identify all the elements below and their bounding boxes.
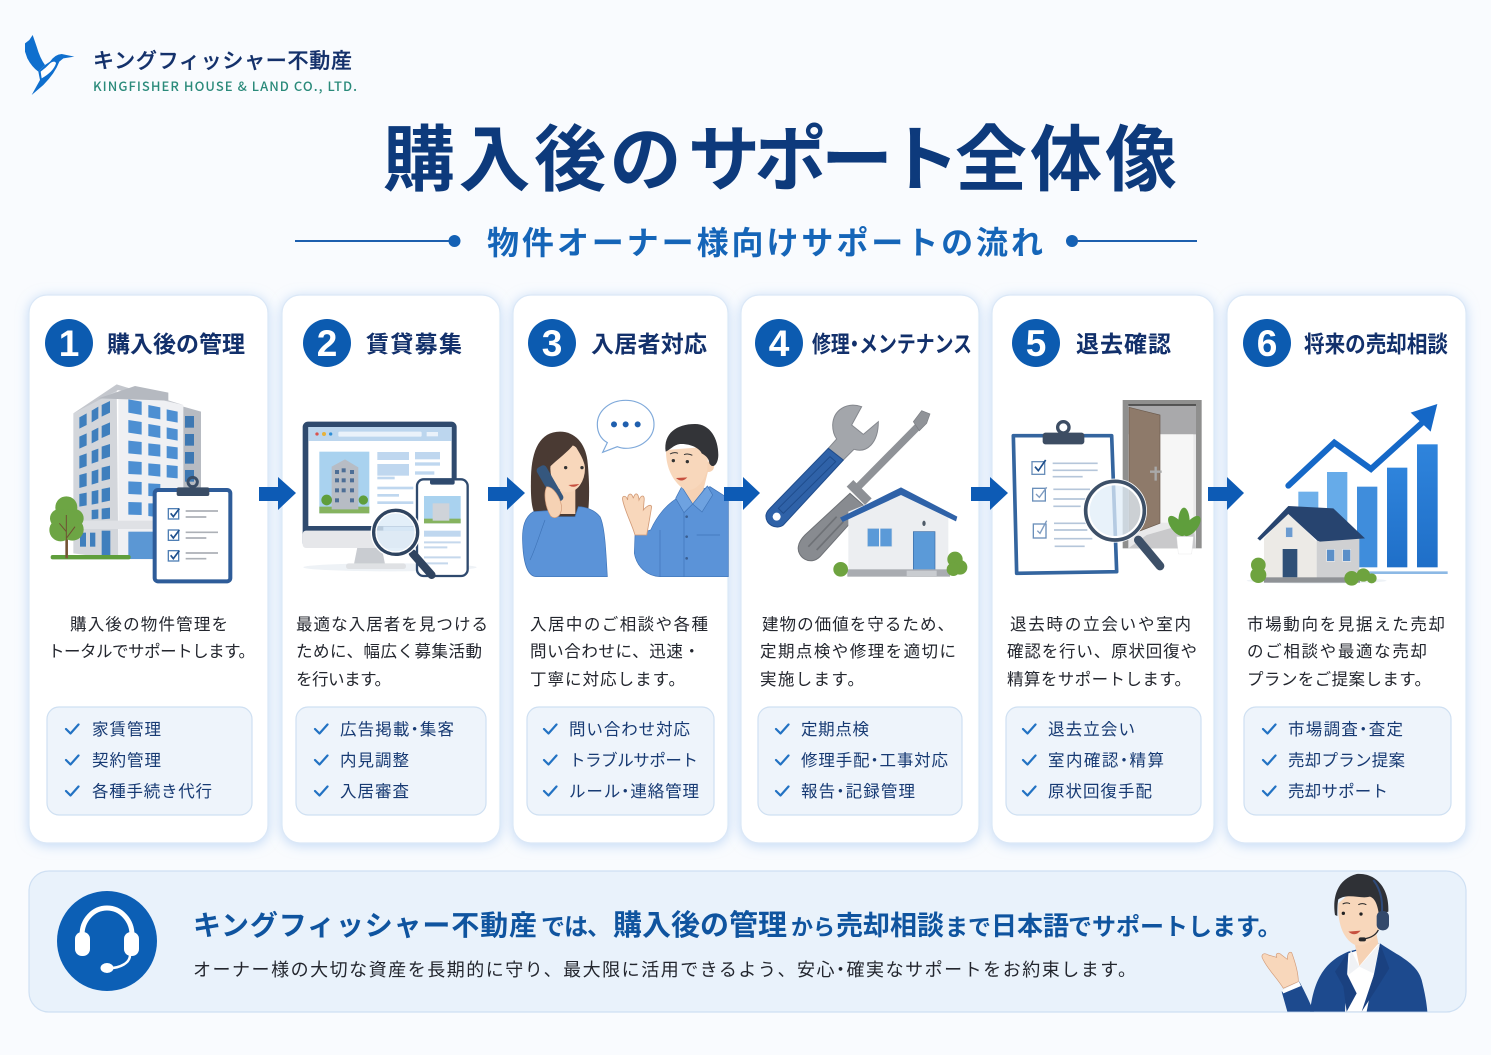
arrow 2: [488, 477, 525, 510]
step 3 checklist: [527, 707, 714, 815]
title: 購入後の: [383, 101, 685, 206]
icon: rising chart with house: [1247, 404, 1448, 586]
step 4 badge: [755, 319, 803, 367]
step 1 checklist: [47, 707, 252, 815]
step 3 description: 丁寧に対応します。: [530, 666, 685, 690]
subtitle: 物件オーナー様向けサポートの流れ: [487, 218, 1043, 264]
step 1 heading: 購入後の管理: [107, 325, 245, 359]
icon: building with clipboard: [49, 384, 230, 581]
step 2 badge: 2: [317, 323, 337, 364]
step 4 description: 定期点検や修理を適切に: [760, 638, 956, 662]
step 3 badge: [528, 319, 576, 367]
step 6 badge: 6: [1257, 323, 1277, 364]
arrow 5: [1208, 477, 1244, 510]
icon: wrench, screwdriver and house: [766, 405, 967, 577]
panel: step 5: [992, 295, 1214, 843]
step 1 checklist: 各種手続き代行: [92, 778, 212, 802]
step 2 badge: [303, 319, 351, 367]
panel: step 2: [282, 295, 500, 843]
step 2 heading: 賃貸募集: [366, 325, 462, 359]
step 5 heading: 退去確認: [1076, 325, 1171, 359]
subtitle: [295, 218, 1197, 264]
step 1 checklist: 家賃管理: [92, 716, 161, 740]
step 3 badge: 3: [542, 323, 562, 364]
step 3 description: 問い合わせに、迅速・: [530, 638, 700, 662]
step 1 description: 購入後の物件管理を: [70, 611, 228, 635]
step 5 description: 確認を行い、原状回復や: [1007, 638, 1197, 662]
step 5 description: 退去時の立会いや室内: [1010, 611, 1191, 635]
banner headline: から: [791, 910, 835, 942]
logo english name: KINGFISHER HOUSE & LAND CO., LTD.: [93, 76, 357, 95]
title: サポート: [688, 101, 954, 206]
banner headline: 購入後の管理: [613, 902, 787, 944]
step 5 description: 精算をサポートします。: [1007, 666, 1191, 690]
step 2 checklist: [296, 707, 486, 815]
arrow 1: [259, 477, 296, 510]
arrow 3: [724, 477, 760, 510]
step 1 description: [48, 611, 255, 662]
step 6 checklist: [1244, 707, 1451, 815]
arrow 4: [971, 477, 1008, 510]
step 4 description: 実施します。: [760, 666, 864, 690]
step 1 badge: [45, 319, 93, 367]
step 6 heading: 将来の売却相談: [1304, 325, 1448, 359]
banner headline: では、: [541, 907, 610, 942]
step 6 checklist: 売却サポート: [1288, 778, 1388, 802]
step 6 description: [1247, 611, 1445, 690]
panel: step 4: [741, 295, 979, 843]
logo: [25, 35, 357, 95]
step 2 checklist: 広告掲載・集客: [340, 716, 454, 740]
step 4 heading: 修理・メンテナンス: [812, 325, 972, 359]
step 5 checklist: [1006, 707, 1201, 815]
step 4 checklist: 修理手配・工事対応: [801, 747, 948, 771]
step 2 description: [296, 611, 488, 690]
title: 全体像: [955, 101, 1180, 206]
icon: headset: [57, 891, 157, 991]
step 6 checklist: 売却プラン提案: [1288, 747, 1406, 771]
step 4 badge: 4: [769, 323, 790, 364]
step 6 description: 市場動向を見据えた売却: [1247, 611, 1445, 635]
step 5 description: [1007, 611, 1197, 690]
step 5 checklist: 原状回復手配: [1048, 778, 1152, 802]
banner headline: まで: [945, 908, 991, 942]
step 4 description: [760, 611, 956, 690]
step 6 checklist: 市場調査・査定: [1288, 716, 1403, 740]
icon: clipboard, magnifier and door: [1013, 400, 1204, 573]
banner headline: 日本語: [991, 906, 1069, 943]
step 4 checklist: 報告・記録管理: [801, 778, 915, 802]
step 5 badge: 5: [1026, 323, 1046, 364]
banner headline: でサポートします。: [1068, 907, 1282, 942]
step 2 description: ために、幅広く募集活動: [296, 638, 482, 662]
step 3 heading: 入居者対応: [591, 325, 707, 359]
step 3 checklist: トラブルサポート: [569, 747, 698, 771]
step 1 badge: 1: [59, 323, 79, 364]
step 1 checklist: 契約管理: [92, 747, 161, 771]
step 5 checklist: 退去立会い: [1048, 716, 1135, 740]
panel: step 1: [29, 295, 268, 843]
step 6 description: のご相談や最適な売却: [1247, 638, 1427, 662]
step 6 description: プランをご提案します。: [1247, 666, 1431, 690]
logo name: キングフィッシャー不動産: [93, 45, 352, 75]
icon: two people talking: [522, 400, 728, 577]
step 4 checklist: 定期点検: [801, 716, 870, 740]
step 3 description: 入居中のご相談や各種: [530, 611, 708, 635]
step 4 description: 建物の価値を守るため、: [762, 611, 954, 635]
banner headline: 売却相談: [836, 904, 944, 943]
icon: kingfisher bird: [25, 35, 74, 95]
step 2 checklist: 内見調整: [340, 747, 409, 771]
panel: step 6: [1227, 295, 1466, 843]
step 2 checklist: 入居審査: [340, 778, 409, 802]
icon: support agent: [1262, 874, 1427, 1012]
step 3 checklist: ルール・連絡管理: [569, 778, 699, 802]
step 4 checklist: [758, 707, 962, 815]
step 1 description: トータルでサポートします。: [48, 638, 255, 662]
step 3 description: [530, 611, 708, 690]
step 6 badge: [1243, 319, 1291, 367]
icon: monitor, phone and magnifier: [303, 422, 477, 576]
panel: step 3: [513, 295, 728, 843]
step 5 checklist: 室内確認・精算: [1048, 747, 1164, 771]
step 2 description: を行います。: [296, 666, 391, 690]
step 3 checklist: 問い合わせ対応: [569, 716, 690, 740]
step 5 badge: [1012, 319, 1060, 367]
banner body text: オーナー様の大切な資産を長期的に守り、最大限に活用できるよう、安心・確実なサポートをお約束します。: [193, 956, 1136, 982]
step 2 description: 最適な入居者を見つける: [296, 611, 488, 635]
panel: bottom support banner: [29, 871, 1466, 1012]
speech bubble: [597, 400, 654, 452]
banner headline: キングフィッシャー不動産: [193, 904, 538, 944]
